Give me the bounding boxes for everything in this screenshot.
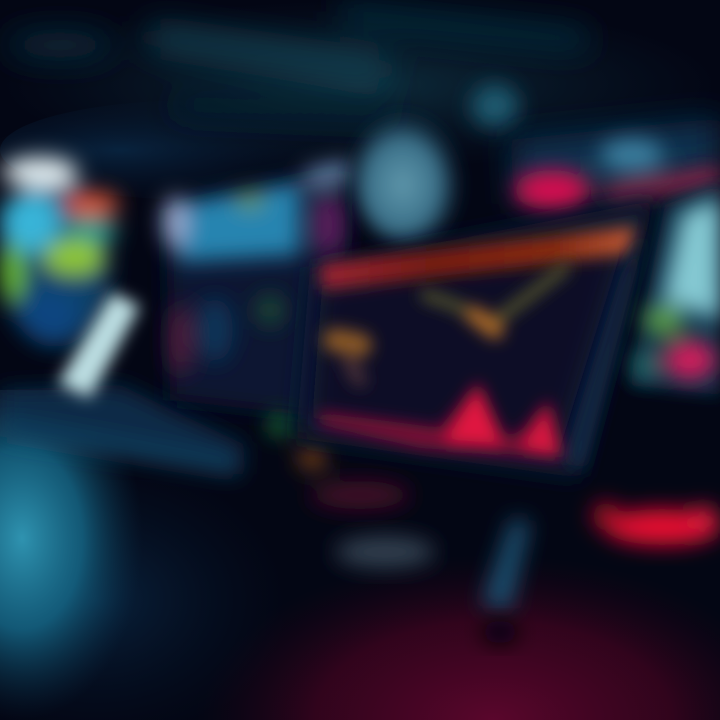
monitor stand: slanted blue post <box>482 518 530 610</box>
main monitor: frame <box>296 200 655 478</box>
main monitor: right edge <box>568 230 645 468</box>
desk object: grey base <box>335 536 435 568</box>
background: top teal streaks <box>5 5 590 122</box>
glow: red light strip right <box>592 502 720 545</box>
left screen: colourful chart panel <box>0 157 140 398</box>
floor: teal glow bottom left <box>0 390 320 720</box>
left screen: white slanted bar <box>58 292 140 398</box>
background: upper room haze <box>0 0 720 200</box>
main monitor: screen <box>312 240 625 455</box>
monitor stand: foot <box>482 620 518 644</box>
right screen: teal chart panel <box>630 185 720 395</box>
main monitor <box>296 200 655 478</box>
sphere: grey-blue globe <box>352 110 464 246</box>
main monitor: crimson area chart <box>318 382 562 458</box>
middle screen: dashboard panel <box>163 160 410 509</box>
middle screen: chart traces <box>170 294 410 509</box>
main monitor: line chart <box>335 268 565 380</box>
main monitor: red header bar <box>320 226 636 290</box>
desk: keyboard band <box>0 385 245 475</box>
light: small teal orb <box>471 84 519 128</box>
top right screen: crimson and blue strip <box>510 118 720 210</box>
floor: red glow bottom right <box>180 420 720 720</box>
